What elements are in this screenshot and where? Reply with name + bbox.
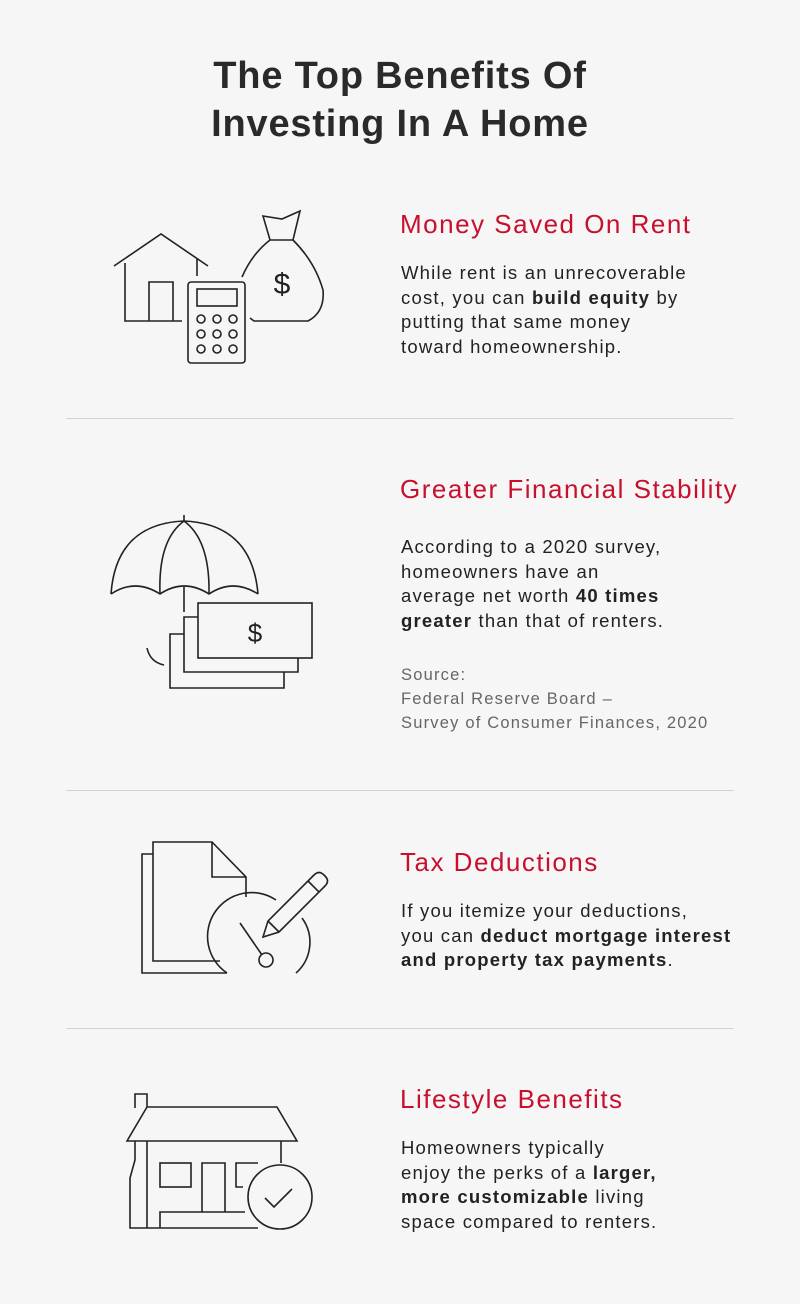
source: Federal Reserve Board –	[401, 690, 613, 708]
text: stability	[401, 536, 664, 631]
text: lifestyle: more customizable living	[401, 1186, 645, 1207]
text: tax	[401, 900, 731, 970]
title	[211, 55, 589, 145]
text: money saved: While rent is an unrecoverable	[401, 262, 687, 283]
heading: stability: Greater Financial Stability	[400, 474, 738, 504]
text: stability: average net worth 40 times	[401, 585, 660, 606]
text: lifestyle	[401, 1137, 657, 1232]
source: Source:	[401, 666, 466, 684]
heading: tax: Tax Deductions	[400, 847, 599, 877]
text: money saved	[401, 262, 687, 357]
text: money saved: cost, you can build equity by	[401, 286, 678, 308]
icon: house calculator money bag	[114, 211, 323, 363]
text: tax: and property tax payments.	[401, 949, 674, 970]
title: The Top Benefits Of	[213, 55, 587, 97]
heading: money saved: Money Saved On Rent	[400, 209, 692, 239]
text: stability: greater than that of renters.	[401, 610, 664, 630]
source: Survey of Consumer Finances, 2020	[401, 714, 708, 732]
source	[401, 666, 708, 732]
text: tax: you can deduct mortgage interest	[401, 924, 731, 946]
text: lifestyle: space compared to renters.	[401, 1210, 657, 1232]
icon: umbrella and cash: $	[248, 618, 263, 648]
text: stability: According to a 2020 survey,	[401, 536, 661, 557]
icon: umbrella and cash	[111, 515, 312, 688]
heading: lifestyle: Lifestyle Benefits	[400, 1084, 624, 1114]
icon: house calculator money bag: $	[274, 268, 291, 301]
text: money saved: toward homeownership.	[401, 336, 623, 356]
text: money saved: putting that same money	[401, 311, 631, 332]
text: stability: homeowners have an	[401, 560, 600, 582]
text: tax: If you itemize your deductions,	[401, 900, 688, 921]
text: lifestyle: enjoy the perks of a larger,	[401, 1162, 657, 1182]
icon: house with checkmark	[127, 1094, 312, 1229]
icon: tax document with pencil	[142, 842, 328, 973]
text: lifestyle: Homeowners typically	[401, 1137, 605, 1158]
title: Investing In A Home	[211, 103, 589, 145]
